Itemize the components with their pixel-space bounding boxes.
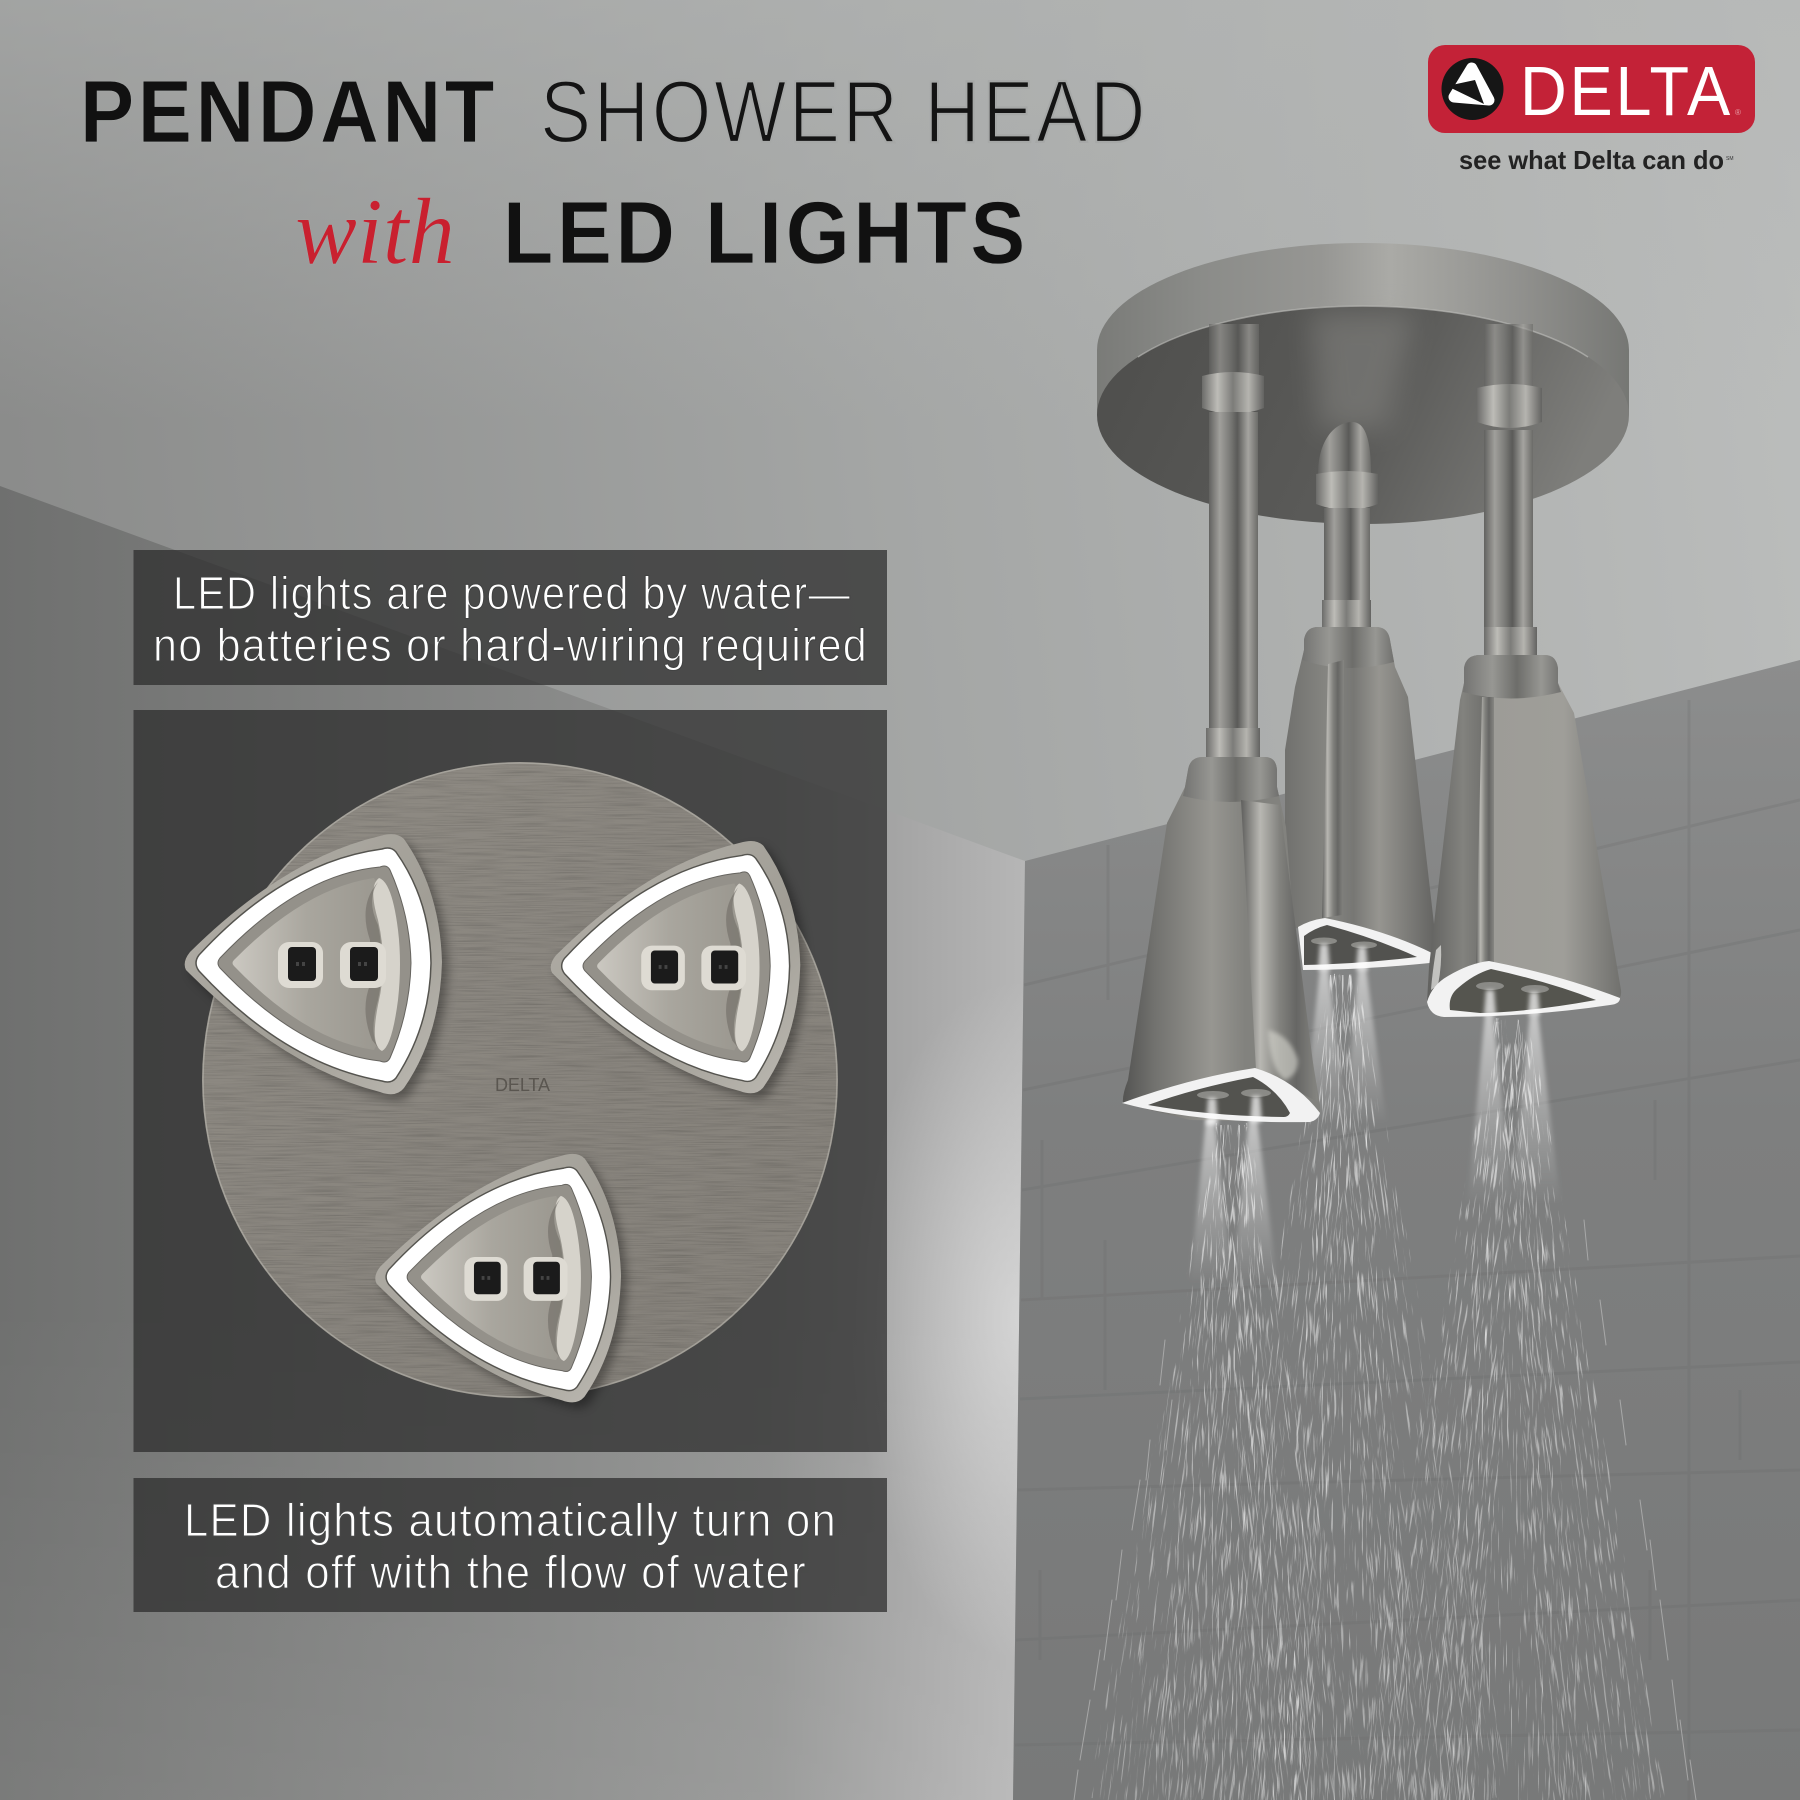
left pendant head: [1122, 757, 1320, 1122]
caption line 2: no batteries or hard-wiring required: [153, 619, 868, 671]
right stem: [1477, 324, 1542, 657]
logo mark: [1442, 58, 1504, 120]
spray: stray droplets: [1074, 1220, 1696, 1800]
background: tiled right wall: [1013, 660, 1800, 1800]
spray: middle head: [1179, 967, 1511, 1800]
center stem: [1316, 422, 1378, 628]
caption line 1: LED lights automatically turn on: [184, 1494, 837, 1546]
Delta logo: [1428, 45, 1755, 175]
pendant shower assembly: [1097, 243, 1629, 1125]
right head nozzles: [1476, 982, 1549, 993]
background: left wall: [0, 486, 1025, 1800]
title word: PENDANT: PENDANT: [80, 62, 498, 161]
title word: with: with: [295, 180, 455, 284]
spray: right head: [1354, 1012, 1666, 1800]
brushed metal disc: [200, 760, 840, 1400]
water spray: [1074, 967, 1696, 1800]
center pendant head: [1285, 627, 1435, 970]
caption line 1: LED lights are powered by water—: [173, 567, 851, 619]
nozzle jets, upper portion: [1206, 944, 1540, 1125]
right pendant head: [1427, 655, 1621, 1017]
logo wordmark: DELTA: [1520, 52, 1733, 130]
left stem: [1202, 324, 1264, 758]
caption box: automatic on and off: [134, 1478, 887, 1612]
title words: SHOWER HEAD: SHOWER HEAD: [540, 62, 1148, 161]
disc engraved DELTA mark: DELTA: [495, 1075, 550, 1095]
jets near nozzles: [1190, 968, 1560, 1280]
panel background: [134, 710, 887, 1452]
tagline: see what Delta can do: [1459, 145, 1724, 175]
logo badge: [1428, 45, 1755, 133]
ceiling canopy: [1097, 243, 1629, 524]
center head nozzles: [1311, 938, 1377, 948]
registered mark: ®: [1735, 108, 1741, 117]
title: [80, 62, 1148, 284]
caption line 2: and off with the flow of water: [215, 1546, 807, 1598]
service mark: SM: [1726, 156, 1734, 162]
shower face: bottom: [375, 1154, 627, 1408]
shower face: upper left: [185, 834, 448, 1100]
title words: LED LIGHTS: LED LIGHTS: [503, 183, 1029, 282]
shower face: upper right: [551, 841, 806, 1099]
panel: top-view of shower head faces: [134, 710, 887, 1452]
caption box: powered by water: [134, 550, 887, 685]
spray: left head: [1087, 1118, 1373, 1800]
